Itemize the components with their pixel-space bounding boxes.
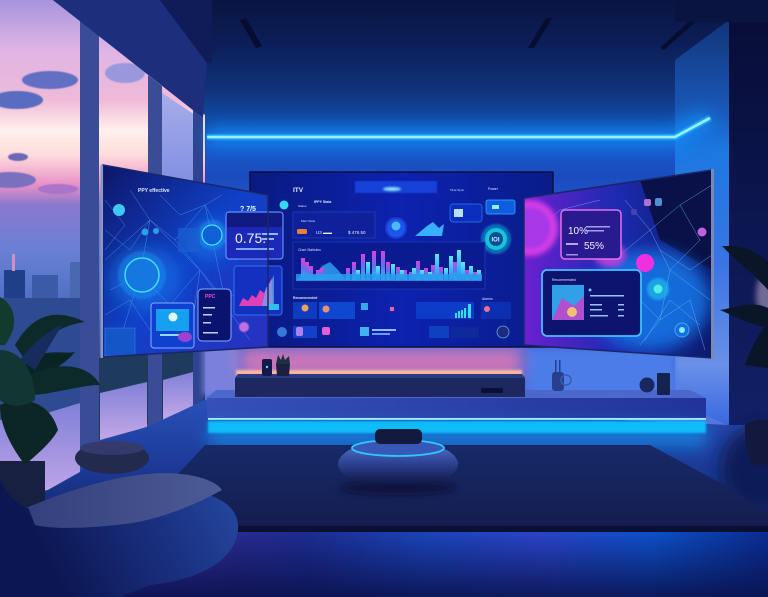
top labels: Power <box>488 187 499 191</box>
phone card <box>198 289 231 341</box>
floor band <box>0 532 768 597</box>
clouds <box>0 63 145 194</box>
network lines <box>552 186 711 350</box>
low platform <box>207 390 706 418</box>
center screen <box>250 172 553 347</box>
blue node <box>675 323 689 337</box>
third pane <box>162 93 195 380</box>
city skyline <box>0 254 80 408</box>
readout label: ? 7/5 <box>240 206 256 213</box>
pink glow behind console <box>236 348 522 376</box>
lit spot on column <box>756 273 768 317</box>
rug <box>130 445 768 526</box>
bezel <box>100 165 268 358</box>
large plant <box>0 297 100 507</box>
lounge chair <box>0 473 238 597</box>
stats card: 10% <box>568 226 588 237</box>
main bar chart <box>293 242 485 289</box>
leaves <box>0 297 100 465</box>
heading text: PPY effective <box>138 188 170 194</box>
ceiling light strip <box>207 118 710 137</box>
summary card: U3 ▬▬ <box>316 230 333 235</box>
top labels: ITV <box>293 187 304 194</box>
mountain chart <box>415 222 444 236</box>
widget row one: Alarms <box>482 297 493 301</box>
pink spot <box>239 322 249 332</box>
stool <box>75 441 149 474</box>
console <box>235 374 525 397</box>
top frame and blind <box>53 0 212 118</box>
teal radial button: IOI <box>492 238 500 244</box>
summary card: $ 476.50 <box>348 230 366 235</box>
small potted plant <box>276 354 290 376</box>
dark starfield corner <box>640 170 712 270</box>
lavender wall below screens <box>203 345 675 395</box>
summary card <box>293 212 375 238</box>
phone card: PPC <box>205 294 216 300</box>
bar chart card <box>234 266 282 315</box>
window sky panes <box>0 0 205 500</box>
blue nebula <box>590 250 710 350</box>
speaker on console <box>262 359 272 376</box>
plant pot <box>0 461 45 507</box>
back wall <box>0 0 768 440</box>
right plant pot <box>745 420 768 465</box>
right side wall and column <box>675 0 768 427</box>
readout card <box>226 212 283 259</box>
floor <box>0 400 768 597</box>
left window <box>0 0 212 500</box>
glowing orb large <box>118 251 166 299</box>
stats card: 55% <box>584 241 604 252</box>
readout card: 0.75. <box>235 230 266 246</box>
top labels <box>293 187 499 208</box>
magenta glow lower <box>594 243 626 267</box>
stats card <box>561 210 621 259</box>
bezel <box>524 169 714 360</box>
bottom-left tile <box>105 328 135 356</box>
panel small <box>178 228 200 252</box>
cyan floor light <box>208 418 706 447</box>
round vase and box <box>640 373 670 395</box>
magenta orb small <box>636 254 654 272</box>
ceiling vents <box>240 0 720 50</box>
right plant <box>720 246 768 368</box>
small orbs <box>113 204 159 236</box>
status icon <box>280 200 288 210</box>
chair seat <box>28 473 222 528</box>
magenta ring glow <box>524 197 560 260</box>
smart puck <box>338 429 458 495</box>
small icons <box>631 198 662 215</box>
top labels: Status <box>298 204 307 208</box>
media card: Recommended <box>552 278 576 282</box>
circular gauge <box>386 218 406 238</box>
media card <box>542 270 641 336</box>
network lines <box>104 190 250 340</box>
top labels: IPPY Stats <box>314 200 331 204</box>
right screen <box>504 169 714 360</box>
top search bar <box>355 181 437 193</box>
window mullions <box>80 18 203 452</box>
pink node <box>698 228 706 236</box>
widget row one: Recommended <box>293 296 317 300</box>
mug with brushes <box>552 360 571 391</box>
left screen <box>100 165 283 358</box>
summary card: Main Stats <box>301 219 316 223</box>
rug front edge <box>130 526 768 532</box>
teal orb <box>647 278 669 300</box>
glowing orb medium <box>197 220 227 250</box>
cards top right <box>450 200 515 222</box>
top labels: Time Sync <box>450 188 465 192</box>
image card <box>151 303 194 348</box>
widget row two <box>277 326 509 338</box>
blue glow field <box>109 218 234 310</box>
widget row one <box>293 296 511 319</box>
main bar chart: Chart Statistics <box>298 248 321 252</box>
terrace and trees <box>0 345 205 500</box>
teal radial button <box>481 224 511 254</box>
right floor shade <box>720 425 768 515</box>
